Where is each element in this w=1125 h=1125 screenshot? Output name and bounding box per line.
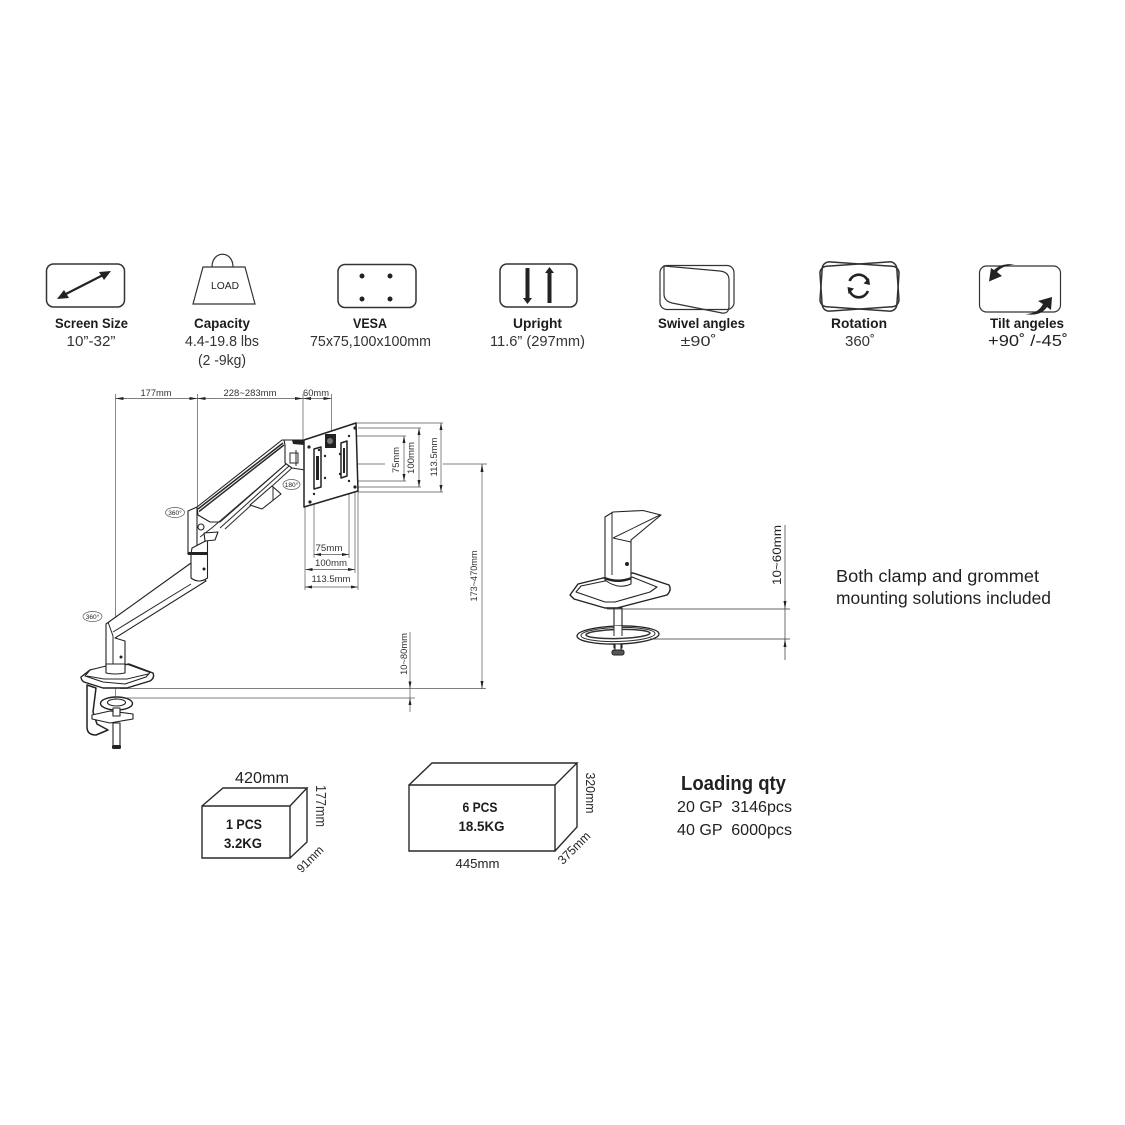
quantities: 20 GP 3146pcs	[677, 799, 792, 816]
dimension lines: arm reach and height: 177mm	[140, 388, 172, 398]
heading: rotation: Rotation	[831, 315, 887, 331]
diagram: monitor arm with clamp	[81, 388, 487, 749]
spec panel: upright	[490, 264, 585, 350]
value: VESA: 75x75,100x100mm	[310, 334, 431, 350]
value: capacity: 4.4-19.8 lbs	[185, 334, 259, 350]
upright stub	[605, 510, 661, 586]
rotation badge: 360 degrees upper: 360°	[168, 509, 182, 517]
upper gas spring arm	[197, 440, 293, 541]
spec panel: VESA	[310, 264, 431, 350]
rotation badge: 180 degrees	[283, 480, 300, 490]
quantities: 40 GP 6000pcs	[677, 822, 792, 839]
package: single box	[202, 770, 328, 875]
dimension lines: arm reach and height: 60mm	[303, 388, 329, 398]
spec panel: swivel angles	[658, 266, 745, 350]
carton outline	[409, 763, 577, 851]
dimension lines: VESA plate: 100mm	[315, 558, 347, 568]
carton dimensions: 445mm	[456, 857, 500, 871]
carton contents	[458, 799, 505, 834]
box contents: 1 PCS	[226, 816, 262, 832]
quantities	[677, 799, 792, 839]
heading: VESA: VESA	[353, 315, 387, 331]
spec panel: screen size	[46, 264, 128, 350]
carton contents: 6 PCS	[462, 799, 498, 815]
joint box	[284, 440, 305, 470]
box dimensions	[235, 770, 328, 875]
grommet plate and screw	[577, 608, 659, 655]
spec panel: tilt angles	[980, 264, 1068, 350]
dimension: 10 to 60mm	[607, 525, 790, 660]
package: carton of six	[409, 763, 597, 871]
value: screen size: 10”-32”	[66, 334, 116, 350]
dimension lines: arm reach and height: 228~283mm	[224, 388, 276, 398]
dimension lines: VESA plate	[305, 423, 443, 590]
text block: mounting note	[836, 566, 1051, 608]
dimension lines: VESA plate: 100mm	[406, 442, 416, 474]
heading: loading qty: Loading qty	[681, 773, 787, 795]
carton dimensions	[456, 772, 597, 871]
heading: upright: Upright	[513, 315, 562, 331]
dimension: 10 to 60mm: 10~60mm	[770, 525, 784, 585]
carton dimensions: 375mm	[555, 829, 593, 867]
rotation badge: 360 degrees lower: 360°	[86, 613, 100, 621]
box dimensions: 420mm	[235, 770, 289, 787]
dimension lines: VESA plate: 113.5mm	[312, 574, 350, 584]
base plate	[570, 573, 670, 608]
dimension lines: arm reach and height	[116, 388, 487, 712]
spec panel: rotation	[819, 261, 900, 350]
value: rotation: 360˚	[845, 334, 875, 350]
box outline	[202, 788, 307, 858]
clamp and base	[81, 664, 154, 749]
rotation badge: 180 degrees: 180°	[285, 481, 299, 489]
icon: tilt	[980, 264, 1060, 315]
heading: screen size: Screen Size	[55, 315, 128, 331]
rotation badge: 360 degrees lower	[83, 612, 102, 622]
box dimensions: 91mm	[294, 843, 326, 875]
rotation badge: 360 degrees upper	[166, 508, 184, 518]
carton dimensions: 320mm	[583, 772, 597, 814]
dimension lines: arm reach and height: 10~80mm	[399, 633, 409, 675]
diagram: grommet mount	[570, 510, 790, 660]
box contents: 3.2KG	[224, 835, 262, 851]
value: tilt angles: +90˚ /-45˚	[988, 333, 1068, 350]
dimension lines: arm reach and height: 173~470mm	[469, 550, 479, 602]
VESA plate	[304, 423, 358, 507]
heading: capacity: Capacity	[194, 315, 250, 331]
box contents	[224, 816, 262, 851]
text block: loading quantity	[677, 773, 792, 839]
icon: VESA holes	[338, 264, 416, 308]
elbow column	[188, 507, 208, 581]
icon: rotation	[819, 261, 900, 312]
icon: swivel	[660, 266, 734, 313]
value: capacity: (2 -9kg)	[198, 353, 246, 369]
text block: mounting note: Both clamp and grommet	[836, 566, 1039, 586]
icon: upright arrows	[500, 264, 577, 307]
value: swivel angles: ±90˚	[680, 334, 716, 350]
heading: swivel angles: Swivel angles	[658, 315, 745, 331]
carton contents: 18.5KG	[458, 818, 505, 834]
icon: screen size	[46, 264, 124, 307]
heading: tilt angles: Tilt angeles	[990, 315, 1064, 331]
lower arm	[106, 563, 206, 674]
dimension lines: VESA plate: 75mm	[391, 447, 401, 473]
spec panel: capacity	[185, 254, 259, 369]
value: upright: 11.6” (297mm)	[490, 334, 585, 350]
icon: load weight: LOAD	[211, 280, 239, 292]
value: capacity	[185, 334, 259, 369]
box dimensions: 177mm	[312, 785, 328, 827]
dimension lines: VESA plate: 75mm	[316, 543, 342, 553]
text block: mounting note: mounting solutions included	[836, 588, 1051, 608]
dimension lines: VESA plate: 113.5mm	[429, 438, 439, 476]
